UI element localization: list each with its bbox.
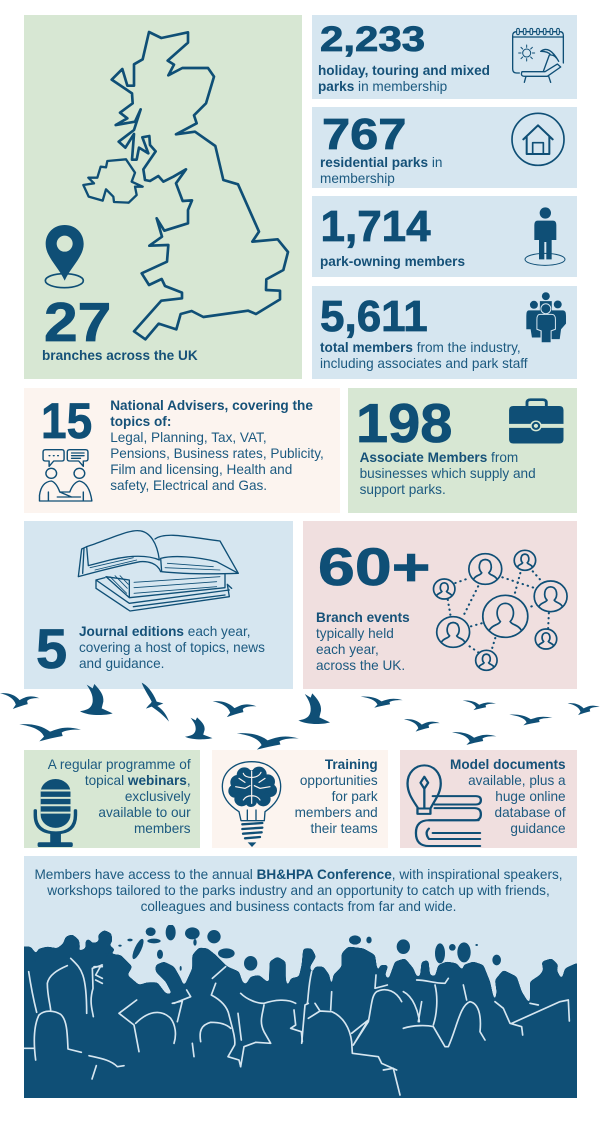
crowd silhouette (24, 925, 577, 1098)
text: national advisers (110, 398, 324, 493)
text: conference (34, 867, 563, 914)
text: associate members: Associate Members from (360, 450, 518, 465)
number: 2,233: 2,233 (320, 20, 425, 59)
panel: training (212, 750, 388, 848)
text: model documents: database of (495, 805, 566, 820)
text: webinars: topical webinars, (85, 773, 191, 788)
text: training: Training (325, 757, 378, 772)
text: training: their teams (310, 821, 378, 836)
text: branch events: across the UK. (316, 658, 405, 673)
text: webinars (48, 757, 191, 836)
number: 5: 5 (36, 617, 67, 680)
text: model documents: huge online (495, 789, 566, 804)
text: model documents: Model documents (450, 757, 566, 772)
text: total members: total members from the industry, (320, 340, 521, 354)
number: 27: 27 (44, 291, 111, 353)
text: holiday parks (318, 63, 490, 94)
text: national advisers: safety, Electrical and Gas. (110, 478, 267, 493)
text: journal editions (79, 624, 265, 671)
number: 767: 767 (322, 110, 406, 159)
panel: UK branches (24, 15, 302, 379)
panel: associate members (348, 388, 577, 513)
text: associate members: support parks. (360, 482, 446, 497)
text: national advisers: Film and licensing, Health and (110, 462, 292, 477)
text: branch events (316, 610, 410, 673)
flock of birds (0, 682, 600, 750)
panel: national advisers (24, 388, 340, 513)
panel: webinars (24, 750, 200, 848)
panel: holiday parks (312, 15, 577, 99)
text: training (295, 757, 378, 836)
text: national advisers: Pensions, Business rates, Publicity, (110, 446, 324, 461)
panel: model documents (400, 750, 577, 848)
text: model documents (450, 757, 566, 836)
caption: branches: branches across the UK (42, 348, 198, 363)
text: conference: workshops tailored to the parks industry and an opportunity to catch up with friends, (47, 883, 550, 898)
icon: person on circle (524, 207, 566, 266)
panel: residential parks (312, 107, 577, 188)
icon: house in circle (511, 112, 565, 166)
panel: journal editions (24, 521, 293, 689)
panel: conference (24, 856, 577, 1098)
text: national advisers: Legal, Planning, Tax, VAT, (110, 430, 267, 445)
number: 60+: 60+ (318, 538, 430, 597)
panel: branch events (303, 521, 577, 689)
text: national advisers: topics of: (110, 414, 171, 429)
icon: calendar with sun lounger (512, 28, 564, 83)
text: total members (320, 340, 528, 371)
text: webinars: available to our (98, 805, 191, 820)
text: associate members (360, 450, 536, 497)
text: journal editions: Journal editions each year, (79, 624, 251, 639)
icon: stack of books (78, 530, 239, 612)
text: training: for park (332, 789, 378, 804)
text: holiday parks: parks in membership (318, 79, 447, 94)
text: holiday parks: holiday, touring and mixed (318, 63, 490, 78)
text: webinars: members (134, 821, 191, 836)
text: webinars: exclusively (125, 789, 191, 804)
number: 1,714: 1,714 (320, 202, 431, 251)
text: conference: Members have access to the annual BH&HPA Conference, with inspirational speakers, (34, 867, 563, 882)
icon: briefcase (509, 398, 564, 444)
text: webinars: A regular programme of (48, 757, 191, 772)
number: 198: 198 (356, 392, 452, 454)
panel: total members (312, 286, 577, 379)
text: national advisers: National Advisers, covering the (110, 398, 313, 413)
number: 15: 15 (41, 393, 92, 449)
text: model documents: available, plus a (468, 773, 566, 788)
icon: group of people (526, 292, 566, 342)
text: model documents: guidance (510, 821, 566, 836)
panel: park-owning members (312, 196, 577, 277)
text: journal editions: and guidance. (79, 656, 164, 671)
icon: two people talking (38, 449, 93, 502)
icon: people network (432, 550, 568, 672)
text: training: opportunities (300, 773, 378, 788)
text: branch events: typically held (316, 626, 394, 641)
text: total members: including associates and park staff (320, 356, 528, 371)
icon: light bulb on books (406, 764, 482, 847)
text: residential parks: residential parks in (320, 154, 442, 170)
text: associate members: businesses which supply and (360, 466, 536, 481)
number: 5,611: 5,611 (320, 292, 428, 341)
icon: microphone (34, 779, 78, 847)
text: residential parks: membership (320, 171, 395, 186)
text: journal editions: covering a host of topics, news (79, 640, 265, 655)
text: branch events: Branch events (316, 610, 410, 625)
text: park-owning members: park-owning members (320, 254, 465, 269)
icon: brain in light bulb (222, 761, 282, 847)
UK map and location pin (44, 30, 290, 341)
text: training: members and (295, 805, 378, 820)
text: branch events: each year, (316, 642, 379, 657)
text: residential parks (320, 154, 442, 186)
text: conference: colleagues and business contacts from far and wide. (141, 899, 456, 914)
